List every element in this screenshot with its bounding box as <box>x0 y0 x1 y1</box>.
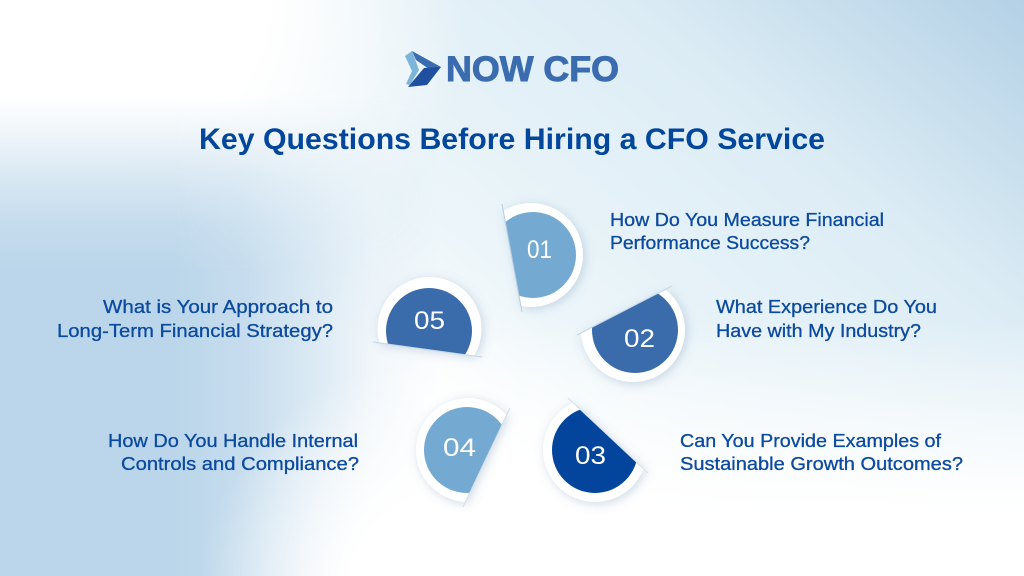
question 04: How Do You Handle Internal <box>108 431 358 451</box>
logo wordmark: NOW CFO <box>446 50 619 89</box>
question 02: What Experience Do You <box>716 297 937 317</box>
question 04: Controls and Compliance? <box>121 454 359 474</box>
segment 03 <box>543 398 648 502</box>
segment 01 <box>502 202 588 313</box>
question 05: What is Your Approach to <box>103 297 333 317</box>
question 01 <box>610 210 884 253</box>
question 04 <box>108 431 359 474</box>
segment 04 <box>416 398 520 507</box>
segment 05 <box>373 275 488 362</box>
segment 02: 02 <box>624 325 655 353</box>
question 03: Can You Provide Examples of <box>680 431 942 451</box>
question 03 <box>680 431 963 474</box>
segment 02 <box>577 278 685 382</box>
question 03: Sustainable Growth Outcomes? <box>680 454 963 474</box>
logo: NOW CFO <box>405 50 619 89</box>
segment 03: 03 <box>575 442 606 470</box>
segment 04: 04 <box>443 434 476 462</box>
question 05 <box>57 297 333 341</box>
question 01: How Do You Measure Financial <box>610 210 884 230</box>
question 02: Have with My Industry? <box>716 321 921 341</box>
question 02 <box>716 297 937 341</box>
title: Key Questions Before Hiring a CFO Service <box>199 123 825 156</box>
question 01: Performance Success? <box>610 233 810 253</box>
segment 01: 01 <box>527 236 552 264</box>
question 05: Long-Term Financial Strategy? <box>57 321 333 341</box>
logo icon <box>405 51 441 87</box>
segment 05: 05 <box>414 307 445 335</box>
